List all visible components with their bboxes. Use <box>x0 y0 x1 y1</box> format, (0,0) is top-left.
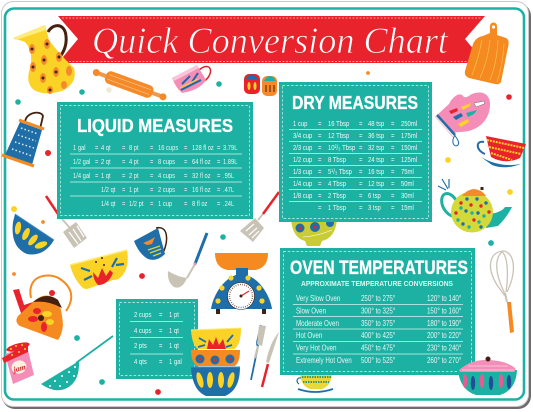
dry row 1: = <box>359 120 363 128</box>
oven row 3: 180° to 190° <box>427 319 461 328</box>
dry row 7: 2 Tbsp <box>328 192 346 200</box>
oven row 6: Extremely Hot Oven <box>296 356 352 365</box>
liquid row 5: = <box>184 200 187 208</box>
liquid row 3: = <box>184 172 187 180</box>
dry row 7: = <box>359 192 363 200</box>
oven row 1: 120° to 140° <box>427 294 461 303</box>
icon: polka dot teapot <box>438 179 512 232</box>
liquid row 5: 1 cup <box>158 200 172 208</box>
dry row 5: = <box>318 168 321 176</box>
dry row 7: 6 tsp <box>368 192 381 200</box>
dry row 5: = <box>391 168 394 176</box>
small row 1: 2 cups <box>134 311 152 319</box>
dry row 3: = <box>359 144 363 152</box>
liquid row 3: 4 cups <box>158 172 176 180</box>
dry row 4: 8 Tbsp <box>328 156 346 164</box>
dry row 5: 75ml <box>401 168 414 176</box>
oven table rows <box>296 294 461 365</box>
icon: fallen spatulas and bowls group start: left spatula <box>46 196 87 248</box>
icon: pink cup <box>172 65 211 93</box>
oven row 5: 450° to 475° <box>361 344 396 353</box>
icon: bowl peeking between panels <box>291 219 337 246</box>
dry row 6: 4 Tbsp <box>328 180 346 188</box>
liquid row 2: = <box>150 158 153 166</box>
liquid row 3: = <box>95 172 98 180</box>
oven row 6: 500° to 525° <box>361 356 396 365</box>
dry row 2: 36 tsp <box>368 132 384 140</box>
liquid row 5: = <box>217 200 220 208</box>
panel: oven temperatures <box>280 248 475 375</box>
small row 4: 4 qts <box>134 358 147 366</box>
dry row 2: 175ml <box>401 132 418 140</box>
liquid row 3: = <box>150 172 153 180</box>
liquid row 2: 8 cups <box>158 158 176 166</box>
icon: jam jar: jam <box>10 362 27 375</box>
dry row 1: = <box>391 120 394 128</box>
icon: cheese grater <box>2 113 44 166</box>
oven row 4: 200° to 220° <box>427 332 461 340</box>
liquid row 2: = <box>217 158 220 166</box>
dry row 3: 32 tsp <box>368 144 384 152</box>
dry row 2: = <box>359 132 363 140</box>
liquid row 2: = <box>122 158 125 166</box>
liquid row 3: = <box>122 172 125 180</box>
icon: red teacup <box>478 136 526 167</box>
liquid table rows <box>73 144 238 208</box>
liquid row 1: 8 pt <box>129 144 139 152</box>
dry row 5: 5¹/₃ Tbsp <box>328 168 352 176</box>
dry row 4: = <box>318 156 321 164</box>
liquid row 4: 1 pt <box>129 186 139 194</box>
icon: blue mug <box>134 228 167 260</box>
dry row 6: 12 tsp <box>368 180 384 188</box>
dry row 3: = <box>318 144 321 152</box>
icon: yellow jug <box>13 25 75 94</box>
oven row 5: 230° to 240° <box>427 344 461 353</box>
dry row 8: 1 Tbsp <box>328 204 346 212</box>
liquid row 4: 16 fl oz <box>192 186 211 194</box>
liquid row 5: .24L <box>223 200 234 208</box>
dry row 1: 1 cup <box>293 120 308 128</box>
panel: dry measures <box>279 82 432 222</box>
liquid row 2: 1.89L <box>223 158 238 166</box>
liquid row 4: 1/2 qt <box>101 186 116 194</box>
small row 4: = <box>159 358 162 366</box>
oven row 1: 250° to 275° <box>361 294 396 303</box>
small row 3: = <box>159 342 162 350</box>
liquid row 1: 1 gal <box>73 144 86 152</box>
subheading: APPROXIMATE TEMPERATURE CONVERSIONS <box>301 281 453 288</box>
liquid row 2: = <box>184 158 187 166</box>
dry row 6: 50ml <box>401 180 414 188</box>
icon: blue bowl <box>13 214 54 254</box>
dry row 4: 24 tsp <box>368 156 384 164</box>
icon: right spatula <box>240 192 279 242</box>
oven row 4: 400° to 425° <box>361 332 396 340</box>
dry row 1: 16 Tbsp <box>328 120 349 128</box>
dry row 8: = <box>359 204 363 212</box>
liquid row 4: = <box>217 186 220 194</box>
liquid row 3: 1 qt <box>101 172 111 180</box>
dry row 5: = <box>359 168 363 176</box>
heading: dry measures: DRY MEASURES <box>292 92 418 113</box>
liquid row 1: 3.79L <box>223 144 238 152</box>
dry row 7: = <box>391 192 394 200</box>
dry row 4: = <box>391 156 394 164</box>
oven row 5: Very Hot Oven <box>296 344 337 353</box>
liquid row 2: 4 pt <box>129 158 139 166</box>
dry row 1: 48 tsp <box>368 120 384 128</box>
liquid row 1: = <box>95 144 98 152</box>
liquid row 1: 4 qt <box>101 144 111 152</box>
small row 2: = <box>159 327 162 335</box>
icon: jam jar <box>2 341 34 384</box>
liquid row 1: 128 fl oz <box>192 144 214 152</box>
liquid row 3: 2 pt <box>129 172 139 180</box>
dry table rows <box>293 120 418 212</box>
icon: stacked bowls <box>191 328 241 396</box>
small row 1: 1 pt <box>169 311 179 319</box>
liquid row 2: 1/2 gal <box>73 158 91 166</box>
icon: small cup under oven panel <box>297 374 333 392</box>
icon: kitchen scale <box>211 253 272 314</box>
liquid row 2: = <box>95 158 98 166</box>
small row 2: 4 cups <box>134 327 152 335</box>
liquid row 5: 8 fl oz <box>192 200 207 208</box>
dry row 2: = <box>318 132 321 140</box>
dry row 6: 1/4 cup <box>293 180 313 188</box>
liquid row 2: 2 qt <box>101 158 111 166</box>
dry row 8: 3 tsp <box>368 204 381 212</box>
icon: whisk <box>490 251 514 333</box>
icon: strainer <box>41 336 113 390</box>
dry row 4: = <box>359 156 363 164</box>
small row 3: 1 qt <box>169 342 179 350</box>
oven row 1: Very Slow Oven <box>296 294 340 303</box>
liquid row 5: 1/4 qt <box>101 200 116 208</box>
icon: cutting board <box>465 22 509 84</box>
small row 2: 1 qt <box>169 327 179 335</box>
dry row 4: 1/2 cup <box>293 156 313 164</box>
panel: liquid measures <box>57 102 253 219</box>
dry row 2: 12 Tbsp <box>328 132 349 140</box>
dry row 7: 1/8 cup <box>293 192 313 200</box>
oven row 2: Slow Oven <box>296 307 326 316</box>
oven row 3: Moderate Oven <box>296 319 339 328</box>
icon: casserole dish <box>458 356 517 395</box>
dry row 6: = <box>391 180 394 188</box>
icon: knife <box>262 332 279 387</box>
title banner <box>58 16 485 63</box>
liquid row 3: 1/4 gal <box>73 172 91 180</box>
liquid row 1: = <box>217 144 220 152</box>
dry row 7: = <box>318 192 321 200</box>
dry row 1: 250ml <box>401 120 418 128</box>
liquid row 1: 16 cups <box>158 144 179 152</box>
liquid row 4: 2 cups <box>158 186 176 194</box>
liquid row 1: = <box>184 144 187 152</box>
oven row 6: 260° to 270° <box>427 356 461 365</box>
icon: yellow bowl with flower, lower left <box>70 250 128 289</box>
panel: small conversions <box>116 299 198 379</box>
dry row 5: 16 tsp <box>368 168 384 176</box>
liquid row 4: = <box>150 186 153 194</box>
icon: fork <box>251 325 266 380</box>
icon: oven mitt <box>435 92 490 146</box>
dry row 7: 30ml <box>401 192 414 200</box>
dry row 3: = <box>391 144 394 152</box>
oven row 4: Hot Oven <box>296 332 322 340</box>
icon: rolling pin <box>91 65 169 104</box>
small row 3: 2 pts <box>134 342 147 350</box>
dry row 3: 10²/₃ Tbsp <box>328 144 355 152</box>
dry row 4: 125ml <box>401 156 418 164</box>
liquid row 4: .47L <box>223 186 234 194</box>
oven row 2: 300° to 325° <box>361 307 396 316</box>
small row 4: 1 gal <box>169 358 182 366</box>
liquid row 2: 64 fl oz <box>192 158 211 166</box>
dry row 1: = <box>318 120 321 128</box>
small table rows <box>134 311 182 366</box>
oven row 2: 150° to 160° <box>427 307 461 316</box>
liquid row 5: = <box>122 200 125 208</box>
small row 1: = <box>159 311 162 319</box>
liquid row 3: = <box>217 172 220 180</box>
liquid row 4: = <box>122 186 125 194</box>
dry row 2: 3/4 cup <box>293 132 313 140</box>
dry row 6: = <box>318 180 321 188</box>
dry row 8: = <box>391 204 394 212</box>
heading: oven temperatures: OVEN TEMPERATURES <box>290 257 468 279</box>
dry row 8: 15ml <box>401 204 414 212</box>
liquid row 3: 32 fl oz <box>192 172 211 180</box>
dry row 5: 1/3 cup <box>293 168 313 176</box>
heading: liquid measures: LIQUID MEASURES <box>77 115 233 136</box>
liquid row 1: = <box>150 144 153 152</box>
oven row 3: 350° to 375° <box>361 319 396 328</box>
dry row 3: 2/3 cup <box>293 144 313 152</box>
dry row 6: = <box>359 180 363 188</box>
liquid row 3: .95L <box>223 172 234 180</box>
liquid row 5: 1/2 pt <box>129 200 144 208</box>
scattered dots <box>11 71 513 395</box>
icon: ladle <box>168 233 207 288</box>
dry row 2: = <box>391 132 394 140</box>
liquid row 5: = <box>150 200 153 208</box>
dry row 8: = <box>318 204 321 212</box>
dry row 3: 150ml <box>401 144 418 152</box>
title: Quick Conversion Chart <box>92 21 450 62</box>
icon: salt shakers <box>244 74 277 96</box>
liquid row 4: = <box>184 186 187 194</box>
icon: orange kettle <box>13 275 71 340</box>
liquid row 1: = <box>122 144 125 152</box>
